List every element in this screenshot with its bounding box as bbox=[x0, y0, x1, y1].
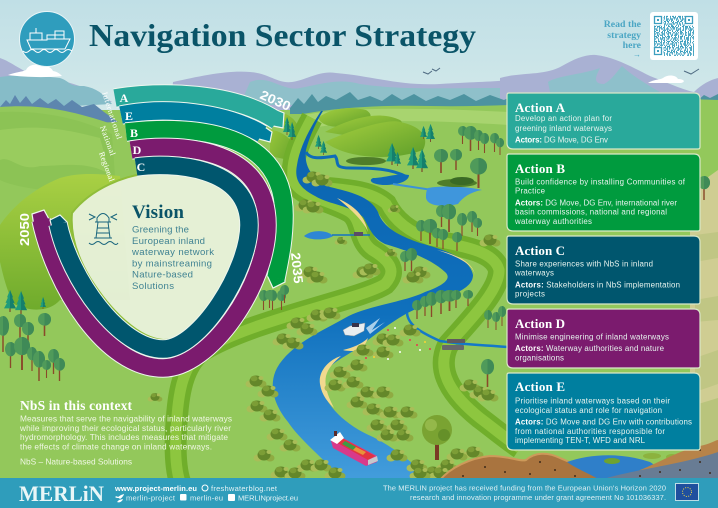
path: west band bbox=[176, 118, 391, 482]
read the strategy callout: → bbox=[633, 50, 641, 59]
lower stream and bridge bbox=[407, 313, 508, 350]
NbS text bbox=[19, 414, 232, 466]
panel: action A: greening inland waterways bbox=[515, 124, 612, 133]
panel: action D: Actors: Waterway authorities and nature bbox=[515, 344, 665, 353]
NbS text: the effects of climate change on inland waterways. bbox=[20, 441, 212, 451]
NbS text: while improving their ecological status, particularly river bbox=[19, 423, 231, 433]
light meadow band bbox=[300, 109, 510, 130]
vision text bbox=[131, 224, 214, 292]
wooded islands bbox=[346, 157, 477, 187]
arc letters: D bbox=[133, 143, 142, 157]
arc letters: A bbox=[120, 91, 129, 105]
panel: action B: waterway authorities bbox=[514, 217, 592, 226]
arc A bbox=[115, 94, 284, 128]
arc letters: B bbox=[130, 126, 138, 140]
panel: action B bbox=[507, 154, 700, 231]
year labels bbox=[17, 87, 306, 284]
panel: action C bbox=[507, 236, 700, 304]
vision text: European inland bbox=[132, 236, 205, 247]
NbS text: Measures that serve the navigability of inland waterways bbox=[20, 414, 232, 424]
panel: action B: Build confidence by installing Communities of bbox=[515, 178, 686, 186]
upper hills bbox=[318, 108, 425, 157]
panel: action D bbox=[507, 309, 700, 368]
contact links: www.project-merlin.eu bbox=[114, 484, 197, 493]
funding statement: research and innovation programme under grant agreement No 101036337. bbox=[410, 493, 666, 502]
vision text: Greening the bbox=[132, 224, 189, 236]
panel: action C: Actors: Stakeholders in NbS implementation bbox=[515, 280, 680, 290]
stream to lake bbox=[393, 184, 432, 190]
panel: action C: Share experiences with NbS in inland bbox=[515, 260, 653, 268]
year labels: 2050 bbox=[17, 213, 32, 246]
vision text: by mainstreaming bbox=[132, 258, 212, 269]
path: east band bbox=[327, 188, 520, 448]
read the strategy callout: Read the bbox=[604, 19, 642, 30]
year labels: 2030 bbox=[258, 87, 293, 114]
deciduous trees bbox=[0, 126, 710, 387]
logo badge: ship bbox=[20, 12, 74, 66]
arc C bbox=[50, 165, 249, 349]
sky bbox=[0, 0, 718, 110]
cloud right bbox=[648, 75, 684, 83]
read the strategy callout: here bbox=[623, 40, 642, 51]
arc D bbox=[32, 147, 267, 368]
arc letters: C bbox=[137, 160, 145, 174]
arc letters: E bbox=[125, 109, 133, 123]
panel: action D: Minimise engineering of inland waterways bbox=[515, 332, 669, 342]
contact links: MERLINproject.eu bbox=[238, 494, 298, 502]
year labels: 2035 bbox=[288, 252, 306, 284]
panel: action E bbox=[507, 373, 700, 450]
panel: action E: ecological status and role for navigation bbox=[515, 406, 662, 415]
panel: action D: organisations bbox=[515, 354, 564, 362]
footer bbox=[0, 478, 718, 508]
roadmap arcs bbox=[32, 94, 285, 368]
scale labels bbox=[97, 91, 124, 184]
contact links bbox=[114, 484, 298, 502]
cargo ship bbox=[330, 431, 378, 466]
panel: action E: from national authorities responsible for bbox=[515, 427, 665, 436]
arc letters bbox=[120, 91, 145, 174]
small pond bbox=[304, 231, 370, 239]
vision block bbox=[89, 202, 214, 292]
lake bbox=[426, 187, 482, 206]
panel: action C: waterways bbox=[514, 268, 554, 278]
panel: action B: Practice bbox=[515, 186, 546, 196]
panel: action B: Actors: DG Move, DG Env, international river bbox=[515, 198, 677, 208]
panel: action E: Action E bbox=[515, 379, 565, 394]
scale labels: International bbox=[100, 91, 124, 141]
contact links: merlin-project bbox=[126, 494, 176, 502]
wetland pond bbox=[567, 453, 678, 480]
treeline bbox=[0, 92, 718, 124]
panel: action E: implementing TEN-T, WFD and NRL bbox=[515, 436, 646, 445]
read the strategy callout: strategy bbox=[607, 30, 641, 41]
funding statement: The MERLIN project has received funding from the European Union's Horizon 2020 bbox=[383, 484, 666, 492]
panel: action A: Action A bbox=[515, 100, 566, 115]
side stream bbox=[306, 152, 407, 177]
panel: action A: Actors: DG Move, DG Env bbox=[515, 136, 608, 144]
meadow flowers bbox=[365, 327, 431, 360]
NbS text: hydromorphology. This includes measures that mitigate bbox=[20, 432, 228, 442]
panel: action B: basin commissions, national and regional bbox=[515, 208, 667, 216]
scale labels: Regional bbox=[97, 151, 116, 184]
panel: action E: Actors: DG Move and DG Env with contributions bbox=[515, 418, 692, 426]
big oak tree bbox=[422, 415, 452, 460]
funding statement bbox=[383, 484, 666, 502]
hills near 2030 bbox=[270, 112, 299, 162]
sandy right edge bbox=[690, 170, 718, 470]
soil: right bbox=[600, 440, 718, 480]
title: Navigation Sector Strategy bbox=[89, 17, 476, 53]
panel: action A: Develop an action plan for bbox=[515, 114, 612, 123]
soil: brown mound bbox=[440, 454, 612, 480]
panel: action C: projects bbox=[515, 290, 545, 298]
stream pool bbox=[371, 175, 409, 185]
left hill bbox=[0, 174, 130, 310]
sand banks bbox=[320, 198, 475, 408]
panel: action D: Action D bbox=[515, 316, 565, 331]
NbS text: NbS – Nature-based Solutions bbox=[20, 456, 132, 466]
river bbox=[273, 111, 473, 480]
panel: action B: Action B bbox=[515, 161, 565, 176]
vision text: waterway network bbox=[131, 247, 214, 258]
vision text: Solutions bbox=[132, 281, 174, 292]
MERLIN logo: MERLiN bbox=[19, 481, 104, 506]
NbS context block bbox=[19, 398, 232, 466]
scale labels: National bbox=[98, 125, 117, 158]
vision heading: Vision bbox=[132, 202, 184, 223]
arc E bbox=[121, 111, 272, 142]
contact links: merlin-eu bbox=[190, 494, 223, 502]
arc B bbox=[126, 130, 285, 288]
panel: action A bbox=[507, 93, 700, 149]
conifers bbox=[4, 117, 435, 314]
vision text: Nature-based bbox=[132, 270, 193, 280]
panel: action C: Action C bbox=[515, 243, 565, 258]
contact links: freshwaterblog.net bbox=[211, 484, 278, 493]
EU flag bbox=[676, 484, 698, 500]
soil specks bbox=[462, 449, 711, 477]
read the strategy callout bbox=[604, 19, 642, 59]
NbS heading: NbS in this context bbox=[20, 398, 132, 413]
cloud left bbox=[8, 65, 62, 77]
birds bbox=[423, 68, 699, 74]
QR code bbox=[650, 12, 698, 60]
distant mountains bbox=[0, 55, 718, 112]
vision shape bbox=[72, 173, 241, 340]
icon: lighthouse bbox=[89, 214, 118, 244]
speed boat bbox=[343, 318, 385, 336]
panel: action E: Prioritise inland waterways based on their bbox=[515, 396, 670, 406]
bushes bbox=[148, 172, 500, 480]
